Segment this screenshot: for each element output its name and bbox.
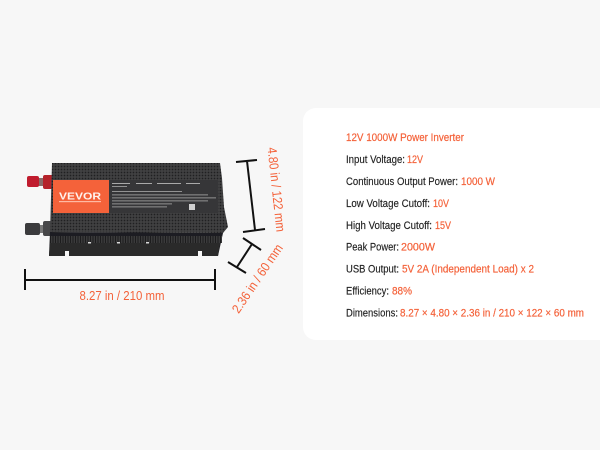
spec: high voltage cutoff: High Voltage Cutoff: <box>346 220 432 232</box>
spec: input voltage: 12V <box>407 154 424 166</box>
spec: efficiency: 88% <box>392 286 412 298</box>
inverter lower casing <box>49 232 223 256</box>
spec title: 12V 1000W Power Inverter <box>346 132 464 144</box>
spec: input voltage: Input Voltage: <box>346 154 405 166</box>
spec: low voltage cutoff: 10V <box>433 198 450 210</box>
dark label area <box>108 180 218 213</box>
spec: usb output: 5V 2A (Independent Load) x 2 <box>402 264 534 276</box>
spec: continuous output power: 1000 W <box>461 176 496 188</box>
height label: 4.80 in / 122 mm <box>265 146 288 233</box>
spec: peak power: Peak Power: <box>346 242 399 254</box>
width dimension line <box>25 269 215 290</box>
panel: specifications <box>303 108 600 340</box>
spec: efficiency: Efficiency: <box>346 286 389 298</box>
orange VEVOR label: VEVOR <box>59 190 101 202</box>
mounting notches <box>65 251 202 256</box>
USB indicators <box>88 242 149 244</box>
spec: peak power: 2000W <box>401 242 436 254</box>
height dimension line <box>236 160 265 232</box>
orange VEVOR label <box>53 180 109 213</box>
depth dimension line <box>228 238 261 273</box>
black negative terminal <box>25 221 52 236</box>
spec: continuous output power: Continuous Output Power: <box>346 176 458 188</box>
power inverter product image <box>25 163 228 256</box>
spec: peak power <box>346 242 436 254</box>
spec: low voltage cutoff: Low Voltage Cutoff: <box>346 198 430 210</box>
depth label: 2.36 in / 60 mm <box>229 241 286 316</box>
red positive terminal <box>27 175 53 189</box>
spec: usb output: USB Output: <box>346 264 399 276</box>
spec: dimensions: Dimensions: <box>346 308 398 320</box>
spec: high voltage cutoff: 15V <box>435 220 452 232</box>
width label: 8.27 in / 210 mm <box>80 288 164 303</box>
spec: usb output <box>346 264 534 276</box>
spec: dimensions: 8.27 × 4.80 × 2.36 in / 210 × 122 × 60 mm <box>400 308 584 320</box>
inverter top casing <box>50 163 228 233</box>
fine print lines <box>112 183 216 210</box>
